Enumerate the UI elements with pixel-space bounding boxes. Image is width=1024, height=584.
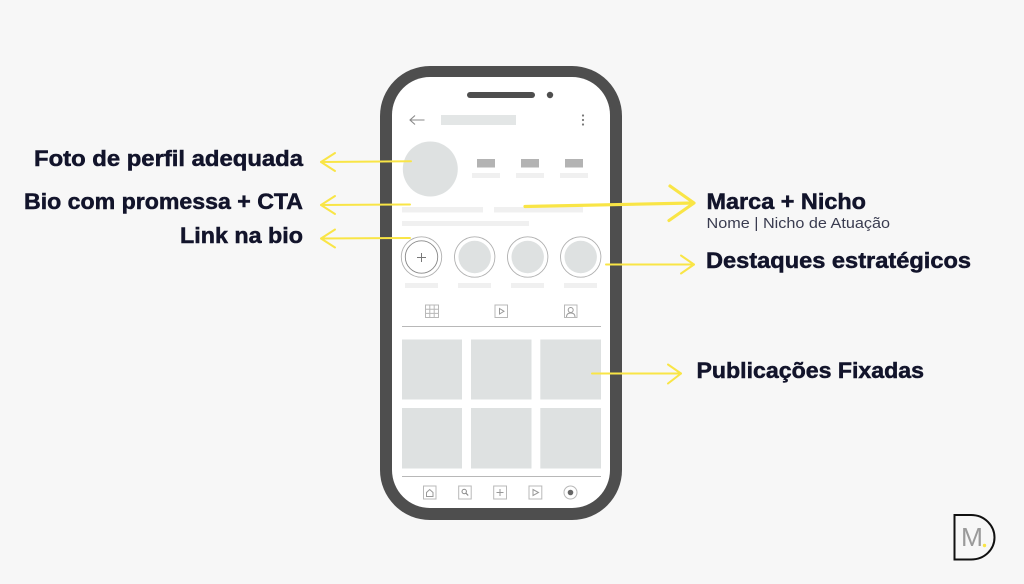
label: bio: Bio com promessa + CTA	[24, 189, 303, 214]
arrow: publicacoes	[592, 364, 681, 384]
tab icons	[426, 305, 577, 318]
arrow: destaques	[606, 256, 694, 274]
icon: search	[459, 486, 471, 499]
label: link na bio: Link na bio	[180, 223, 303, 248]
icon: add	[494, 486, 506, 499]
bottom navigation icons	[424, 486, 577, 499]
highlight 1	[454, 237, 495, 277]
icon: back arrow	[410, 116, 424, 124]
arrow: bio	[321, 196, 410, 214]
pinned posts grid	[402, 340, 601, 468]
highlight 3	[560, 237, 601, 277]
highlight 2	[508, 237, 548, 277]
icon: tagged	[564, 305, 577, 318]
arrow: foto de perfil	[321, 153, 411, 171]
bio lines	[402, 207, 583, 226]
icon: home	[424, 486, 436, 499]
logo: M	[961, 522, 983, 552]
label: destaques: Destaques estratégicos	[706, 248, 971, 273]
highlight: add new	[401, 237, 442, 277]
icon: reels	[529, 486, 542, 499]
profile stats	[472, 159, 588, 178]
phone body	[380, 66, 622, 520]
icon: grid	[426, 305, 438, 318]
story highlights	[401, 237, 601, 288]
profile name placeholder	[441, 115, 516, 125]
phone mockup	[380, 66, 622, 520]
sublabel: nome e nicho: Nome | Nicho de Atuação	[706, 215, 890, 232]
arrow: marca + nicho	[525, 186, 694, 220]
logo	[954, 515, 994, 560]
phone screen	[392, 77, 610, 508]
label: foto de perfil: Foto de perfil adequada	[34, 146, 304, 171]
label: publicacoes: Publicações Fixadas	[696, 358, 924, 383]
icon: reels	[495, 305, 508, 318]
profile photo	[403, 142, 458, 196]
arrow: link na bio	[321, 230, 410, 248]
icon: profile	[564, 486, 577, 499]
icon: menu dots	[582, 114, 584, 126]
speaker and camera	[467, 92, 553, 98]
label: marca + nicho: Marca + Nicho	[706, 189, 866, 214]
